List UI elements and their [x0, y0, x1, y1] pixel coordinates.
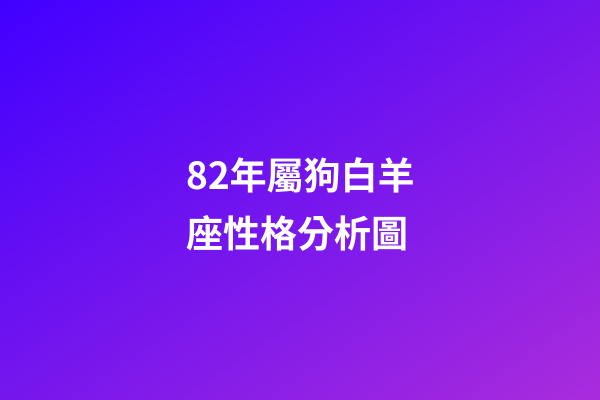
title: 82年屬狗白羊	[186, 146, 415, 200]
title	[186, 146, 415, 258]
title: 座性格分析圖	[186, 204, 408, 258]
